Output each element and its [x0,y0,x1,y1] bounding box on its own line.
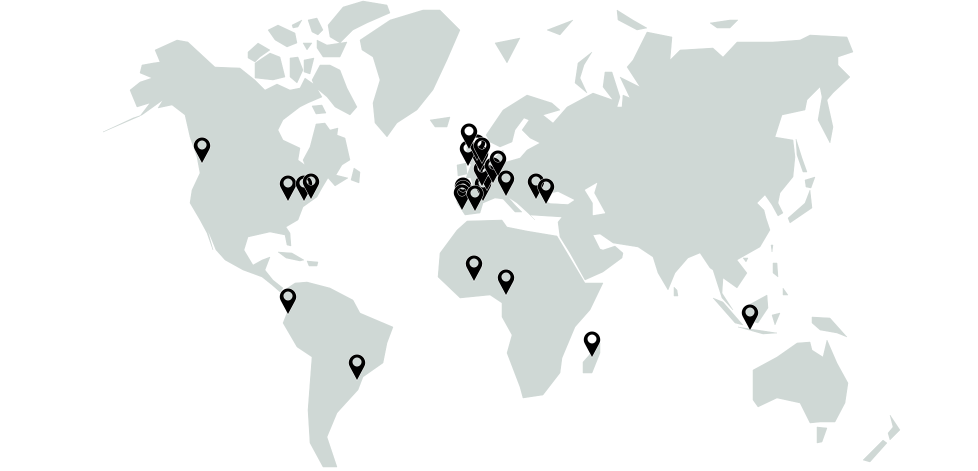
island: Ellef Ringnes [292,20,302,28]
pin: Bulgaria [538,179,554,204]
pin: France south [475,176,491,201]
island: New Zealand south [863,440,887,462]
island: Banks [248,43,270,62]
island: New Guinea [812,317,847,337]
island: Baffin [312,65,357,115]
water: Caspian Sea [585,183,605,215]
island: Honshu [788,190,812,223]
pin: Spain 1 [455,178,471,203]
island: Great Britain [466,146,481,178]
pin: Netherlands [472,146,488,171]
island: Victoria [255,53,285,80]
landmass: Australia [753,340,848,423]
pin: Romania [528,174,544,199]
pin: England 2 [469,135,485,160]
water: Black Sea [544,192,574,204]
pin: Germany 2 [474,161,490,186]
landmass: Eurasia [455,32,853,310]
pin: West Africa 2 [498,270,514,295]
pin: Germany 1 [479,165,495,190]
island: Axel Heiberg [308,18,323,35]
island: Hispaniola [307,261,318,266]
island: Java [738,327,777,334]
island: Tasmania [817,427,827,443]
island: Cuba [278,252,304,261]
pin: Madagascar [584,332,600,357]
island: New Zealand north [888,415,900,440]
island: Cornwallis [303,43,312,50]
landmass: Africa [438,220,603,398]
island: Novaya Zemlya [575,52,592,93]
island: Devon [317,40,347,57]
island: Ireland [457,163,467,176]
island: Hainan [743,258,748,262]
island: Sumatra [713,298,743,325]
island: Iceland [430,117,450,127]
islands: Franz Josef Land [547,20,573,35]
island: Hokkaido [805,177,815,188]
island: Prince of Wales [290,57,303,83]
island: Luzon [773,263,778,277]
pin: Italy [498,171,514,196]
location pins [194,124,758,380]
pin: Indonesia [742,305,758,330]
landmass: North and Central America [103,40,350,292]
pin: England 1 [460,141,476,166]
island: Mindanao [783,288,788,295]
island: Somerset [304,58,314,74]
island: Sri Lanka [674,287,678,296]
pin: central North America [280,176,296,201]
islands: New Siberian [710,20,738,28]
island: Taiwan [771,245,773,252]
pin: Spain 2 [455,181,471,206]
pin: England 3 [474,138,490,163]
landmass: South America [280,282,393,467]
island: Madagascar [583,343,600,373]
pin: Spain east [467,186,483,211]
island: Svalbard [495,38,520,63]
island: Melville [268,25,297,47]
pin: Germany 3 [485,158,501,183]
island: Ellesmere [328,1,390,43]
pin: western Canada [194,138,210,163]
landmass: Greenland [360,10,460,137]
pin: eastern North America 1 [296,176,312,201]
island: Sakhalin [796,139,807,172]
pin: Spain 3 [454,185,470,210]
pin: Germany 4 [490,151,506,176]
island: Borneo [745,295,768,323]
island: Sulawesi [772,313,780,325]
island: Newfoundland [351,168,360,183]
islands: Severnaya Zemlya [617,10,647,30]
pin: West Africa 1 [466,256,482,281]
pin: Scotland [461,124,477,149]
pin: Colombia [280,289,296,314]
pin: eastern North America 2 [303,174,319,199]
island: Southampton [312,105,326,114]
pin: Brazil [349,355,365,380]
